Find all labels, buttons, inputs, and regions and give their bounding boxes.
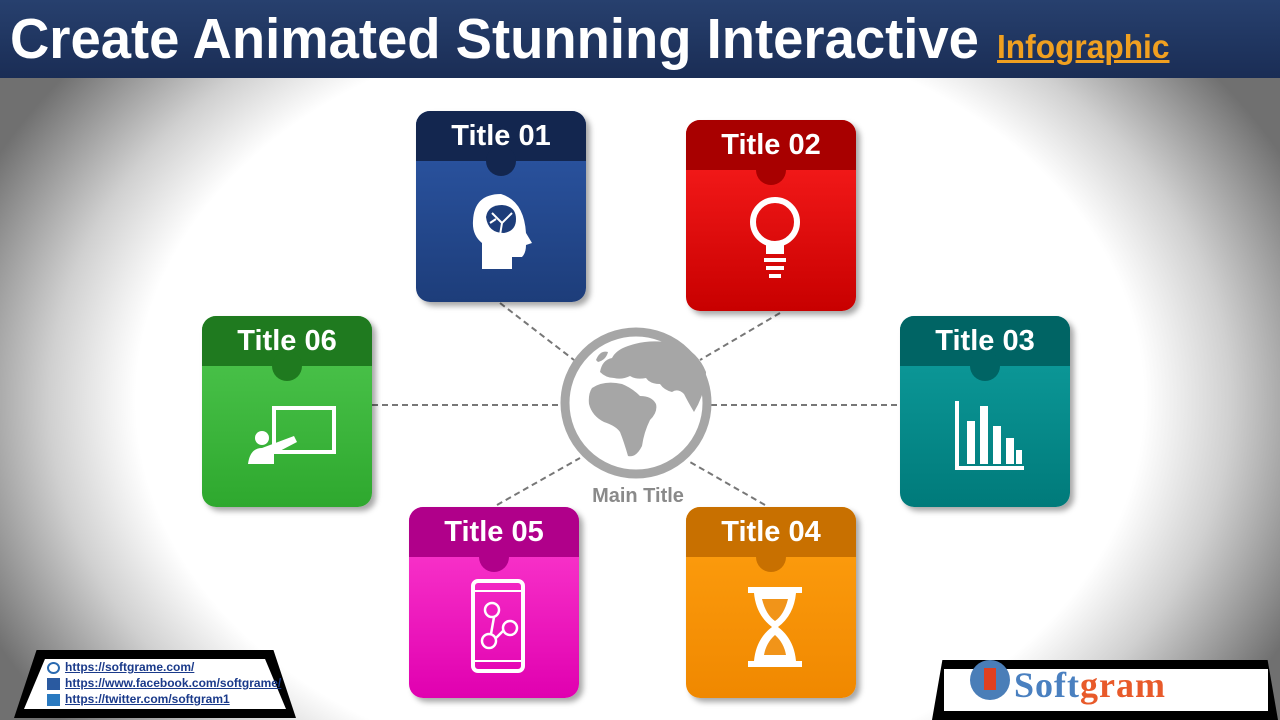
card: Title 03: Title 03 bbox=[935, 325, 1035, 357]
icon: brain head bbox=[472, 194, 532, 269]
card: Title 06 bbox=[202, 316, 372, 507]
logo text: Softgram bbox=[1014, 665, 1166, 705]
main title: Main Title bbox=[592, 485, 684, 507]
icon: bar chart bbox=[955, 401, 1024, 470]
footer: links box: https://www.facebook.com/softgrame/ bbox=[65, 676, 281, 690]
footer: links box: https://twitter.com/softgram1 bbox=[65, 692, 230, 706]
icon: hourglass bbox=[748, 587, 802, 667]
icon: presentation board bbox=[248, 406, 336, 464]
card: Title 02: Title 02 bbox=[721, 129, 821, 161]
footer: logo box bbox=[932, 660, 1278, 720]
card: Title 05 bbox=[409, 507, 579, 698]
icon: light bulb bbox=[750, 197, 800, 278]
title: Create Animated Stunning Interactive bbox=[10, 7, 979, 71]
header bar bbox=[0, 0, 1280, 78]
card: Title 01 bbox=[416, 111, 586, 302]
subtitle: Infographic bbox=[997, 28, 1169, 65]
card: Title 05: Title 05 bbox=[444, 516, 544, 548]
globe bbox=[565, 332, 707, 474]
card: Title 06: Title 06 bbox=[237, 325, 337, 357]
card: Title 01: Title 01 bbox=[451, 120, 551, 152]
card: Title 04 bbox=[686, 507, 856, 698]
logo icon bbox=[970, 660, 1010, 700]
card: Title 04: Title 04 bbox=[721, 516, 821, 548]
icon: smartphone network bbox=[471, 579, 525, 673]
card: Title 02 bbox=[686, 120, 856, 311]
card: Title 03 bbox=[900, 316, 1070, 507]
footer: links box bbox=[14, 650, 296, 718]
footer: links box: https://softgrame.com/ bbox=[65, 660, 194, 674]
